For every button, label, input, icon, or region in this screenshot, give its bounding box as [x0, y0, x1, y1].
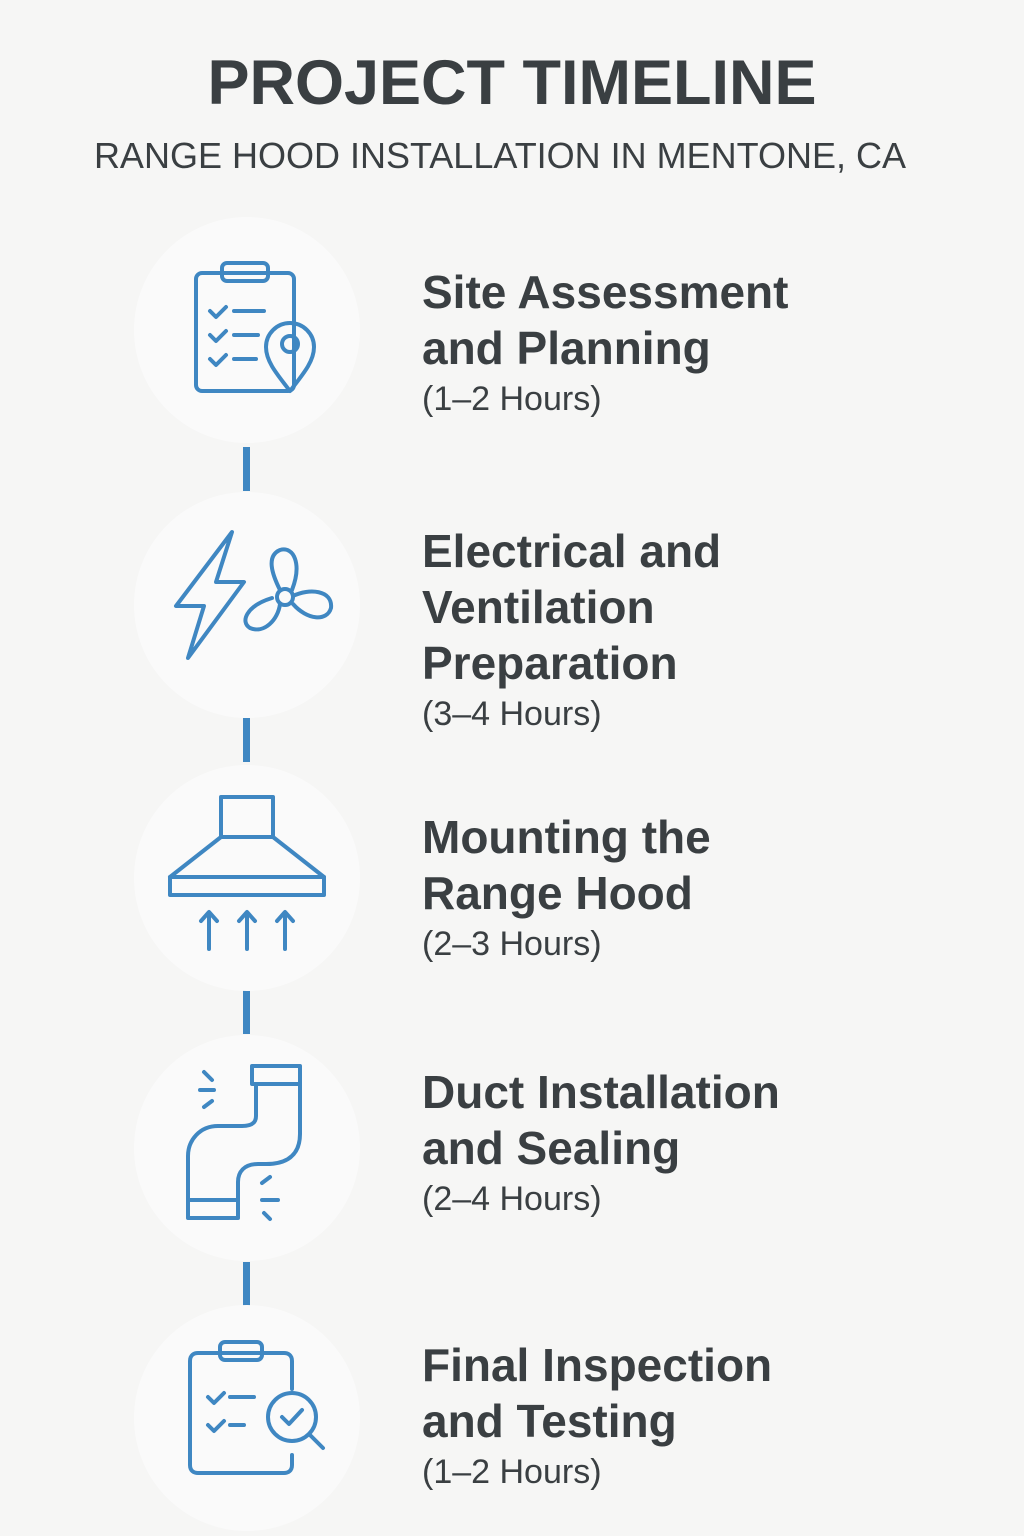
step 1 text: [422, 266, 788, 418]
step 1 text: (1–2 Hours): [422, 380, 602, 418]
step 2 text: Ventilation: [422, 581, 655, 633]
step 2 text: [422, 525, 721, 733]
step 4 text: Duct Installation: [422, 1066, 780, 1118]
title: PROJECT TIMELINE: [207, 48, 817, 118]
step 3 text: (2–3 Hours): [422, 925, 602, 963]
step 5 text: [422, 1339, 772, 1491]
step 1 text: Site Assessment: [422, 266, 788, 318]
subtitle: RANGE HOOD INSTALLATION IN MENTONE, CA: [94, 135, 906, 176]
step 5 icon: clipboard with magnifier: [134, 1305, 360, 1531]
step 1 icon: clipboard with location pin: [134, 217, 360, 443]
step 5 text: and Testing: [422, 1395, 677, 1447]
step 4 text: (2–4 Hours): [422, 1180, 602, 1218]
step 3 icon: range hood with arrows: [134, 765, 360, 991]
step 5 text: Final Inspection: [422, 1339, 772, 1391]
step 4 text: [422, 1066, 780, 1218]
step 5 text: (1–2 Hours): [422, 1453, 602, 1491]
step 4 icon: duct pipe: [134, 1035, 360, 1261]
step 1 text: and Planning: [422, 322, 711, 374]
step 3 text: Range Hood: [422, 867, 693, 919]
step 2 text: (3–4 Hours): [422, 695, 602, 733]
connector dashes: [243, 447, 250, 1306]
step 4 text: and Sealing: [422, 1122, 680, 1174]
step 3 text: [422, 811, 711, 963]
step 3 text: Mounting the: [422, 811, 711, 863]
step 2 text: Preparation: [422, 637, 678, 689]
step 2 icon: lightning and fan: [134, 492, 360, 718]
step 2 text: Electrical and: [422, 525, 721, 577]
